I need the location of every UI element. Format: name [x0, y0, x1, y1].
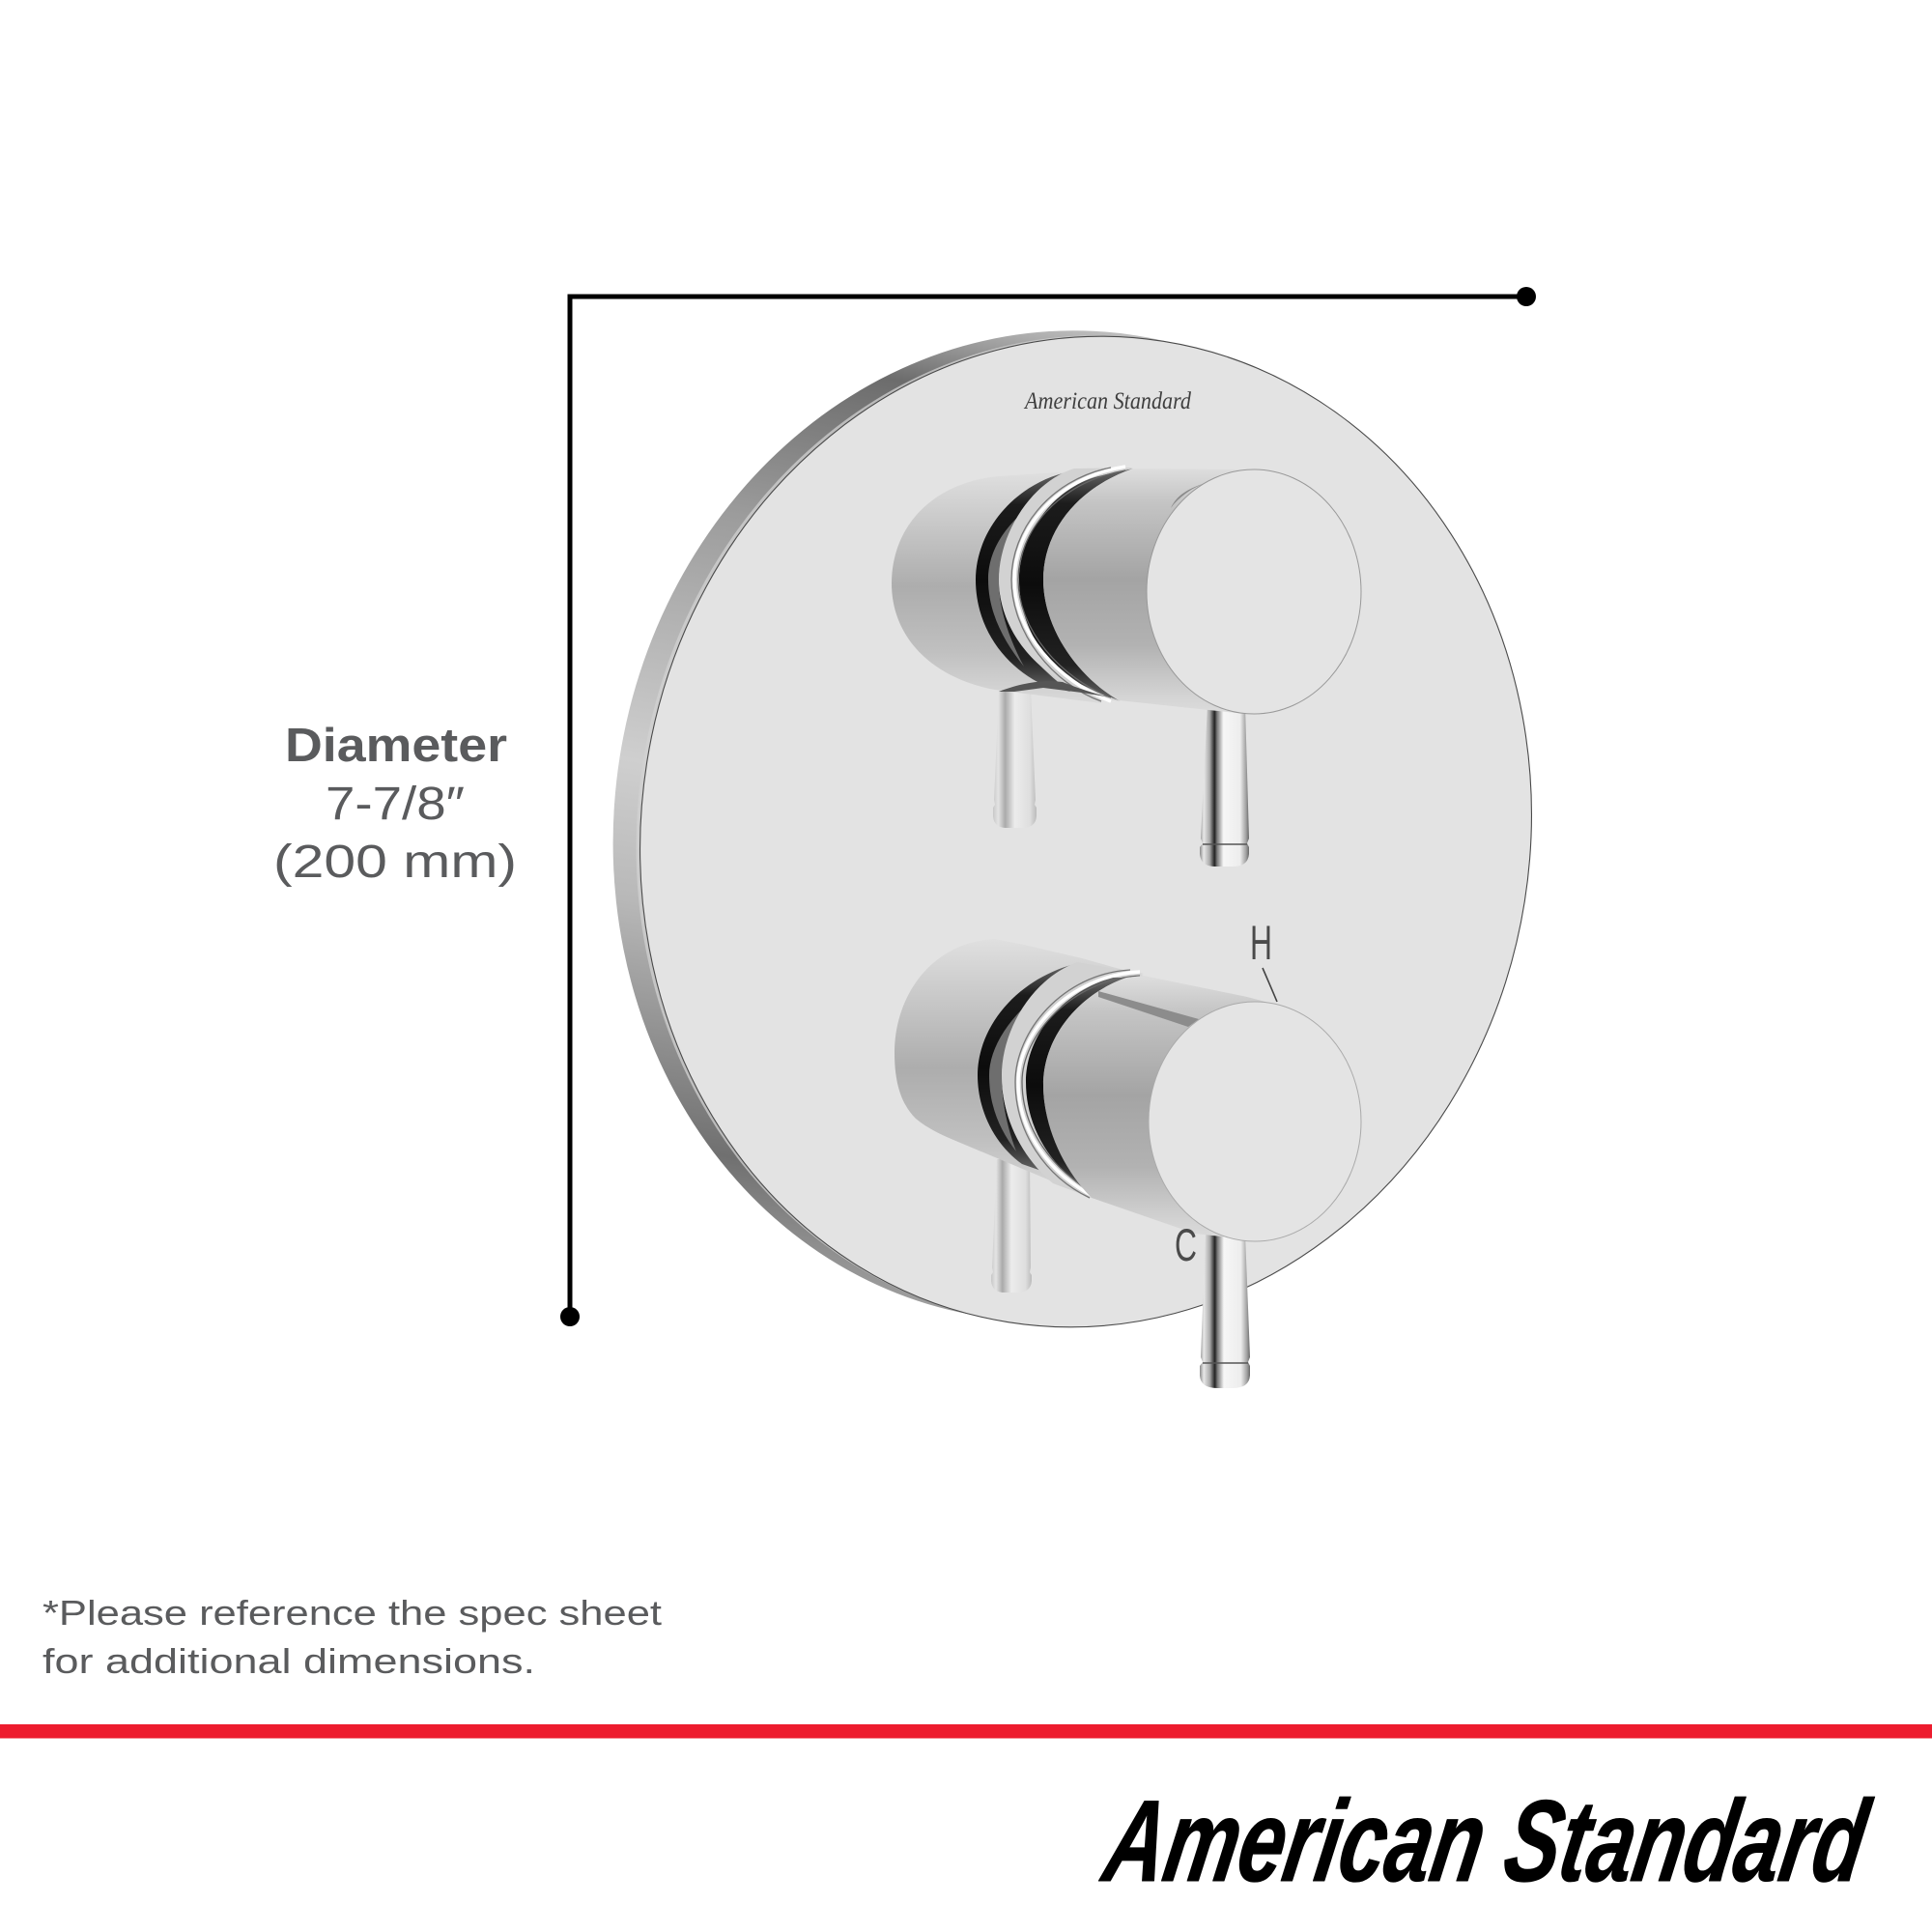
plate logo: American Standard [1023, 388, 1191, 414]
diameter label [273, 720, 517, 888]
lower left lever [991, 1159, 1032, 1293]
lower right lever [1200, 1234, 1250, 1388]
upper knob [892, 467, 1361, 714]
cold marker: C [1175, 1219, 1197, 1270]
upper knob face [1147, 469, 1361, 714]
lower knob [895, 939, 1361, 1241]
upper left lever [993, 691, 1037, 828]
footnote [43, 1593, 662, 1681]
diameter label: 7-7/8″ [326, 779, 465, 830]
hot marker [1250, 916, 1277, 1002]
lower knob face [1149, 1002, 1361, 1241]
footnote: *Please reference the spec sheet [43, 1593, 662, 1633]
diameter label: (200 mm) [273, 837, 517, 888]
upper right lever [1200, 705, 1249, 867]
footnote: for additional dimensions. [43, 1641, 535, 1681]
red divider [0, 1724, 1932, 1739]
hot marker: H [1250, 916, 1272, 970]
dimension bracket [560, 287, 1536, 1326]
diameter label: Diameter [285, 720, 507, 772]
